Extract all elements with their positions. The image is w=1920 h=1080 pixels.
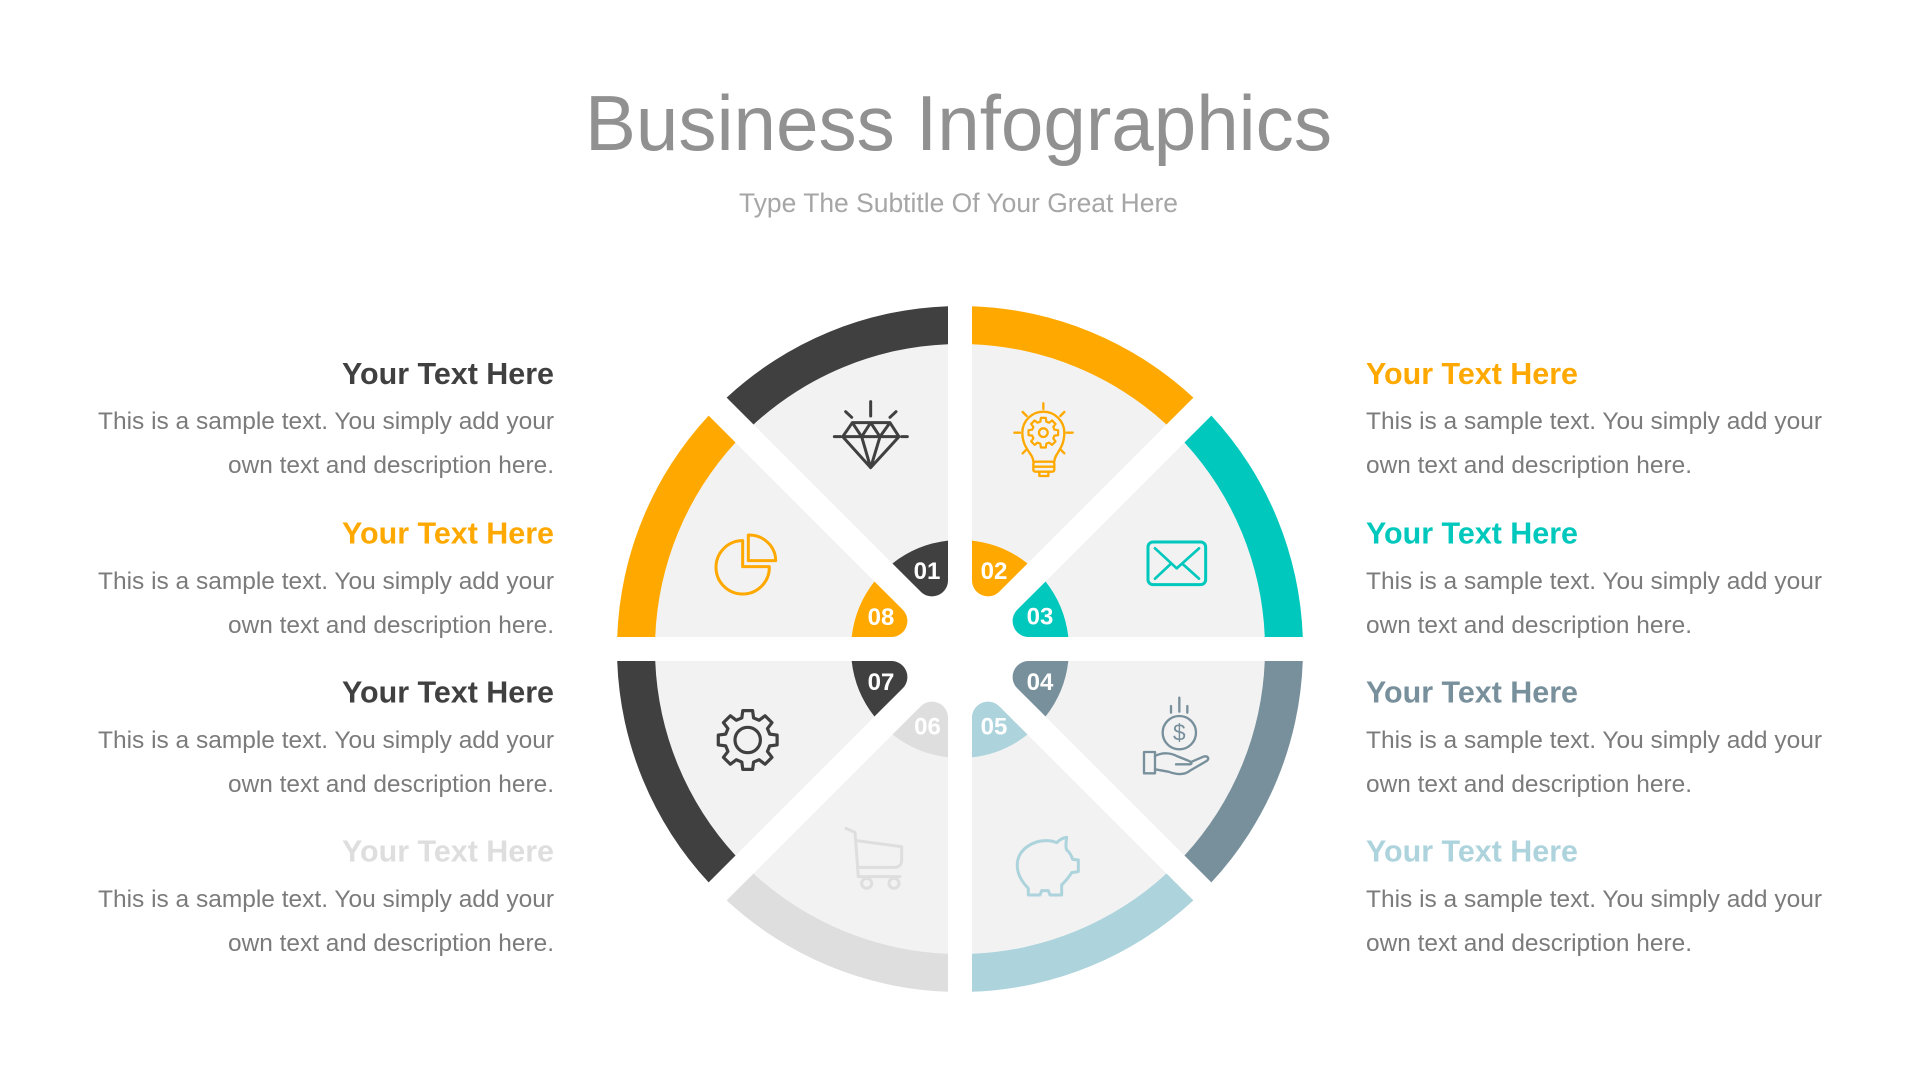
text block: item 08 left top	[98, 356, 554, 479]
text block: right first	[1366, 356, 1822, 479]
body: This is a sample text. You simply add your	[98, 886, 554, 913]
subtitle: Type The Subtitle Of Your Great Here	[739, 188, 1178, 218]
number 04: 04	[1027, 669, 1054, 696]
body: This is a sample text. You simply add your	[98, 408, 554, 435]
heading: Your Text Here	[342, 674, 554, 710]
body: This is a sample text. You simply add your	[98, 727, 554, 754]
segment 06	[727, 702, 948, 992]
text block: right fourth	[1366, 834, 1822, 957]
text block: left fourth	[98, 834, 554, 957]
icon: hand with dollar coin: $	[1173, 720, 1186, 746]
heading: Your Text Here	[1366, 515, 1578, 550]
heading: Your Text Here	[1366, 674, 1578, 710]
body: This is a sample text. You simply add your	[1366, 886, 1822, 913]
number 03: 03	[1027, 604, 1053, 630]
icon: envelope	[1148, 542, 1206, 585]
text block: left second	[98, 515, 554, 639]
text block: right third	[1366, 674, 1822, 798]
icon: piggy bank	[1017, 837, 1078, 895]
body: This is a sample text. You simply add your	[1366, 408, 1822, 435]
number 08: 08	[868, 604, 894, 631]
number 07: 07	[868, 669, 894, 696]
number 02: 02	[981, 558, 1007, 585]
body line 2: own text and description here.	[1366, 771, 1692, 798]
icon: diamond	[834, 402, 907, 468]
heading: Your Text Here	[1366, 356, 1578, 391]
number 06: 06	[914, 714, 941, 740]
body line 2: own text and description here.	[228, 612, 554, 639]
icon: hand with dollar coin	[1144, 698, 1208, 774]
icon: pie chart	[716, 535, 776, 594]
icon: light bulb with gear	[1014, 403, 1073, 476]
heading: Your Text Here	[342, 356, 554, 391]
body line 2: own text and description here.	[1366, 452, 1692, 479]
body line 2: own text and description here.	[228, 771, 554, 798]
body: This is a sample text. You simply add your	[1366, 568, 1822, 595]
segment 01	[727, 306, 948, 596]
icon: shopping cart	[846, 828, 902, 888]
segment 08	[617, 416, 907, 637]
segment 03	[1013, 416, 1303, 637]
heading: Your Text Here	[342, 834, 554, 869]
title: Business Infographics	[585, 79, 1332, 167]
text block: left third	[98, 674, 554, 798]
icon: gear	[718, 711, 777, 769]
body line 2: own text and description here.	[228, 930, 554, 957]
body line 2: own text and description here.	[228, 452, 554, 479]
segment 05	[972, 702, 1193, 992]
body line 2: own text and description here.	[1366, 612, 1692, 639]
segment 04	[1013, 661, 1303, 882]
segment 02	[972, 306, 1193, 596]
heading: Your Text Here	[342, 515, 554, 550]
body: This is a sample text. You simply add your	[1366, 727, 1822, 754]
segment 07	[617, 661, 907, 882]
heading: Your Text Here	[1366, 834, 1578, 869]
body: This is a sample text. You simply add your	[98, 568, 554, 595]
text block: right second	[1366, 515, 1822, 639]
body line 2: own text and description here.	[1366, 930, 1692, 957]
number 01: 01	[914, 558, 940, 585]
number 05: 05	[981, 714, 1007, 740]
